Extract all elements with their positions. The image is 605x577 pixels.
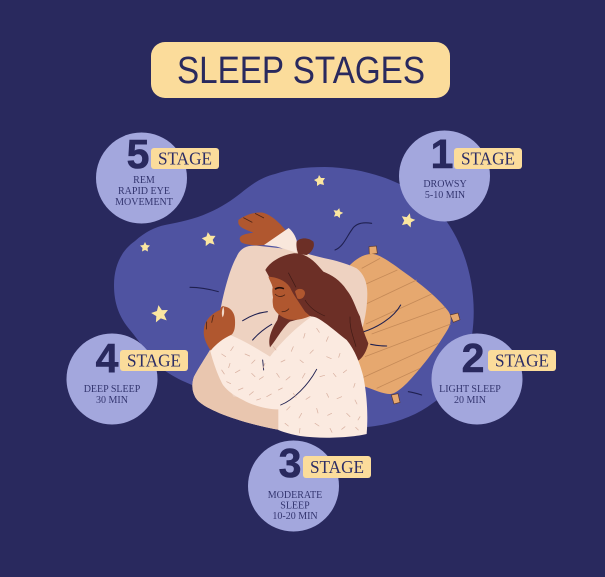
stage 5: RAPID EYE <box>118 186 170 197</box>
stage 2: STAGE <box>495 350 549 370</box>
sweater flecks <box>222 328 360 433</box>
night sky blob <box>114 167 474 430</box>
motion lines <box>190 223 422 395</box>
stage 3: SLEEP <box>280 500 310 512</box>
stage 3: MODERATE <box>268 490 322 501</box>
stage 4: 30 MIN <box>96 395 128 406</box>
sweater <box>210 317 367 438</box>
stage 5: 5 <box>127 131 149 177</box>
stage 4: 4 <box>96 335 119 381</box>
stage 2: 20 MIN <box>454 395 486 406</box>
white pillow <box>192 246 367 430</box>
stage 5: REM <box>133 175 155 186</box>
stage 4 <box>66 334 188 424</box>
hair <box>265 253 368 362</box>
stage 5: MOVEMENT <box>115 197 173 208</box>
stars <box>140 175 417 323</box>
sleeping woman illustration <box>190 212 460 438</box>
stage 2 <box>432 334 556 424</box>
front hand <box>204 306 235 351</box>
stage 3: 3 <box>279 440 301 486</box>
orange cushion <box>337 246 460 404</box>
face <box>268 273 356 347</box>
stage 3: STAGE <box>310 457 364 477</box>
stage 4: DEEP SLEEP <box>84 384 141 395</box>
stage 4: STAGE <box>127 350 181 370</box>
title: SLEEP STAGES <box>177 50 425 92</box>
hair bun <box>296 238 314 255</box>
stage 2: 2 <box>462 335 484 381</box>
stage 1 <box>399 130 522 222</box>
top hand <box>238 212 297 253</box>
title <box>151 42 450 98</box>
stage 1: 1 <box>431 131 453 177</box>
stage 3: 10-20 MIN <box>272 511 318 522</box>
stage 3 <box>248 440 371 532</box>
stage 1: 5-10 MIN <box>425 190 465 201</box>
stage 2: LIGHT SLEEP <box>439 384 501 395</box>
stage 1: STAGE <box>461 148 515 168</box>
stage 5 <box>96 131 219 224</box>
stage 5: STAGE <box>158 148 212 168</box>
stage 1: DROWSY <box>423 179 467 190</box>
